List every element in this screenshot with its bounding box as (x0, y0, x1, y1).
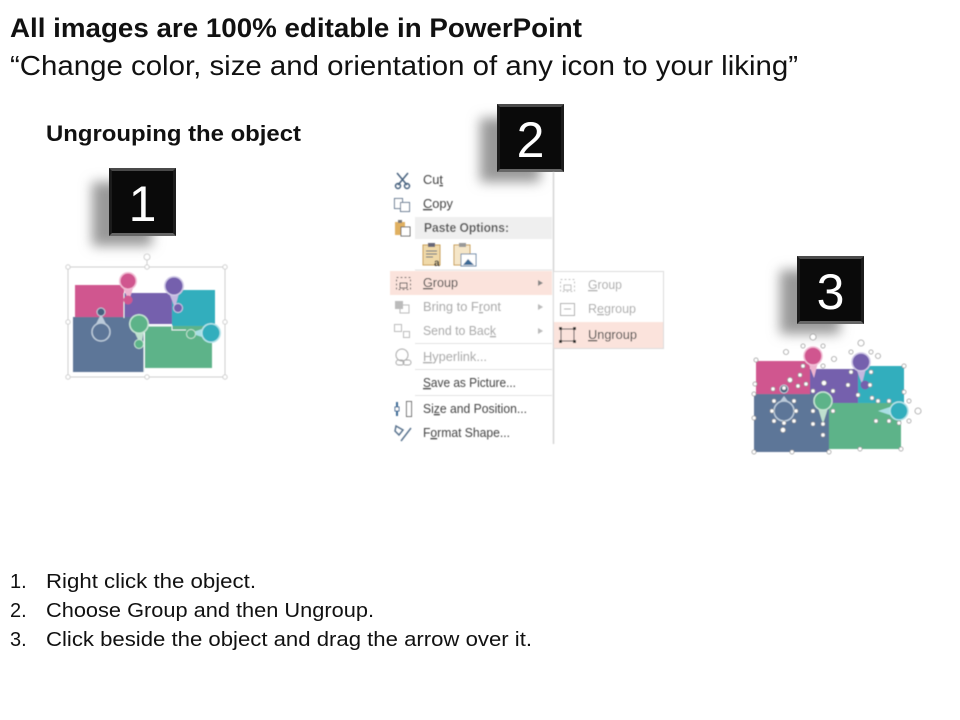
selection frame (66, 254, 227, 379)
icon: bring to front (395, 301, 409, 313)
puzzle graphic 1 (66, 254, 227, 379)
pin: blue ring (774, 385, 794, 421)
puzzle graphic 3 (752, 334, 921, 454)
badge 3: 3 (817, 264, 844, 320)
title: All images are 100% editable in PowerPoint (10, 13, 582, 43)
puzzle pieces (73, 285, 215, 372)
menu labels: Group (423, 275, 458, 290)
context menu (390, 172, 664, 444)
menu labels: Send to Back (423, 323, 496, 338)
pin: green (129, 314, 149, 348)
icon: send to back (394, 324, 410, 338)
puzzle pieces (754, 361, 904, 452)
pin: teal (186, 323, 221, 343)
pin: green (814, 392, 832, 424)
submenu arrows (538, 280, 543, 334)
icon: format shape (395, 426, 411, 441)
submenu: Ungroup (588, 327, 637, 342)
icon: scissors (396, 173, 410, 188)
menu labels (423, 172, 527, 440)
badge 2: 2 (517, 112, 544, 168)
icon: group (396, 278, 410, 290)
instruction list: 3. (10, 629, 27, 651)
submenu: Regroup (588, 301, 636, 316)
menu labels: Format Shape... (423, 425, 510, 440)
icon: submenu regroup (560, 304, 574, 316)
menu labels: Cut (423, 172, 443, 187)
title: “Change color, size and orientation of any icon to your liking” (10, 50, 798, 81)
pin: pink (804, 347, 822, 378)
icon: size and position (395, 402, 412, 416)
pin: teal (878, 402, 908, 420)
menu labels: Hyperlink... (423, 349, 487, 364)
pin: purple (164, 276, 184, 312)
icon: paste text (423, 243, 440, 269)
menu labels: Size and Position... (423, 401, 527, 416)
pin: blue ring (92, 308, 110, 341)
pin: pink (119, 272, 137, 304)
menu labels: Paste Options: (424, 220, 509, 235)
instruction list: Right click the object. (46, 571, 256, 593)
icon: copy (394, 198, 410, 212)
icon: paste text: a (434, 258, 440, 269)
edit handles (752, 334, 921, 454)
submenu: Group (588, 277, 622, 292)
menu labels: Bring to Front (423, 299, 501, 314)
heading: ungrouping the object: Ungrouping the object (46, 121, 302, 146)
badge 2 (480, 104, 564, 182)
badge 1: 1 (129, 176, 156, 232)
icon: paste (395, 220, 410, 236)
instruction list: Click beside the object and drag the arrow over it. (46, 629, 532, 651)
menu highlight rows (390, 217, 552, 396)
pin: purple (852, 353, 870, 390)
title (10, 13, 798, 81)
icon: submenu ungroup (559, 327, 576, 343)
menu labels: Copy (423, 196, 453, 211)
badge 1 (92, 168, 176, 246)
badge 3 (780, 256, 864, 334)
menu labels: Save as Picture... (423, 375, 516, 390)
icon: paste picture (454, 243, 476, 266)
icon: submenu group (560, 280, 574, 292)
icon: hyperlink (396, 349, 411, 365)
instruction list: 2. (10, 600, 27, 622)
instruction list (10, 571, 532, 651)
instruction list: 1. (10, 571, 27, 593)
submenu (554, 272, 664, 348)
instruction list: Choose Group and then Ungroup. (46, 600, 374, 622)
